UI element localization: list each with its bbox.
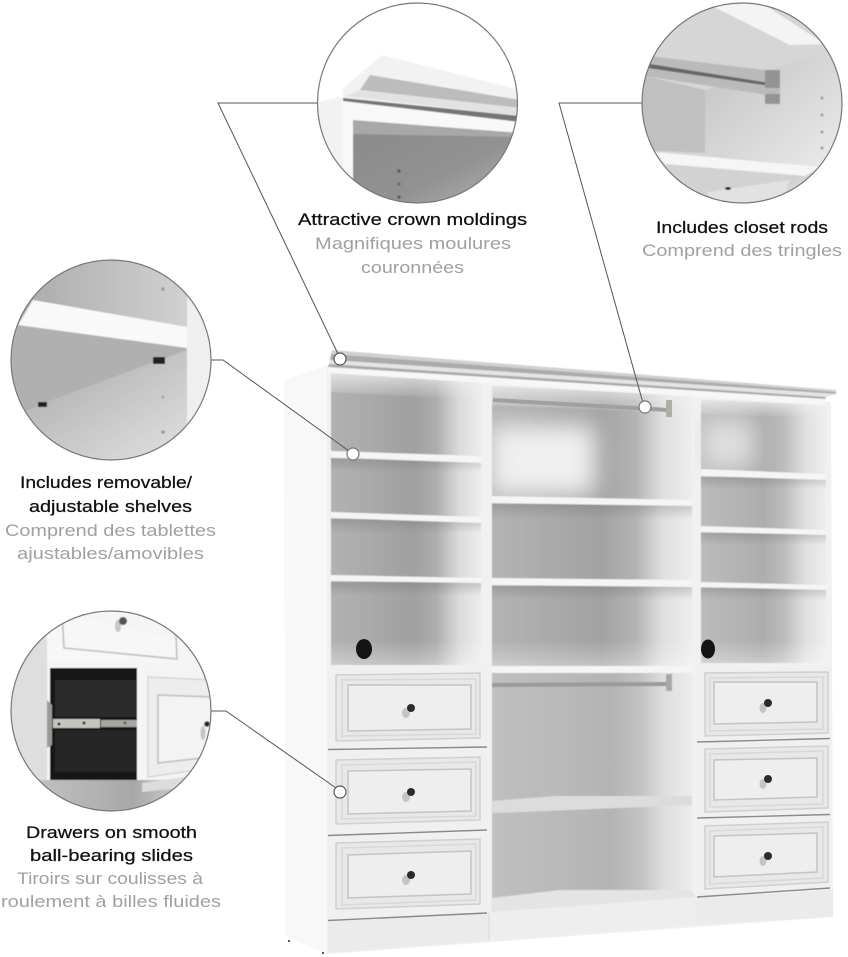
right drawer 3: [697, 816, 830, 897]
holes in bays: [356, 639, 715, 659]
leader line: crown moldings: [218, 103, 338, 354]
leader line: closet rods: [559, 103, 643, 403]
closet rod lower: [492, 674, 672, 691]
marker: closet rods: [639, 401, 651, 413]
caption: drawers: roulement à billes fluides: [1, 892, 221, 911]
leader line: shelves: [211, 360, 349, 451]
marker: drawers: [334, 786, 346, 798]
caption: crown moldings: Attractive crown moldings: [298, 210, 527, 229]
right shelving bay: [701, 400, 826, 663]
left drawer 1: [328, 667, 487, 750]
caption: closet rods: Comprend des tringles: [642, 241, 842, 260]
left drawer 2: [328, 750, 487, 836]
left shelving bay: [331, 372, 481, 665]
side panel: [284, 365, 327, 954]
closet rod upper: [493, 398, 672, 417]
caption: closet rods: [642, 218, 842, 260]
floor: [491, 890, 695, 913]
caption: shelves: Includes removable/: [20, 473, 192, 492]
caption: shelves: adjustable shelves: [29, 497, 192, 516]
right drawer 1: [697, 667, 830, 742]
caption: drawers: Tiroirs sur coulisses à: [17, 869, 204, 888]
plinth base: [288, 890, 833, 954]
left drawer 3: [328, 832, 487, 920]
caption: drawers: ball-bearing slides: [30, 846, 193, 865]
marker: shelves: [347, 448, 359, 460]
center shelving bay: [490, 386, 692, 673]
caption: crown moldings: [298, 210, 527, 277]
detail circle: drawer slide: [10, 610, 215, 815]
front frame: [327, 366, 833, 954]
detail circle: crown molding: [317, 3, 520, 205]
caption: closet rods: Includes closet rods: [656, 218, 828, 237]
lower center compartment: [491, 673, 695, 913]
caption: drawers: Drawers on smooth: [26, 823, 197, 842]
detail circle: closet rod: [641, 2, 845, 205]
leader line: drawers: [211, 711, 336, 788]
storage unit illustration: [284, 350, 836, 954]
detail circle: adjustable shelf: [10, 259, 212, 462]
marker: crown moldings: [334, 353, 346, 365]
caption: shelves: Comprend des tablettes: [5, 521, 216, 540]
right drawer 2: [697, 740, 830, 818]
crown molding: [328, 350, 836, 405]
caption: shelves: ajustables/amovibles: [17, 544, 204, 563]
caption: drawers: [1, 823, 221, 911]
caption: crown moldings: couronnées: [361, 258, 464, 277]
caption: shelves: [5, 473, 216, 563]
lower shelf: [491, 796, 692, 813]
caption: crown moldings: Magnifiques moulures: [315, 234, 511, 253]
